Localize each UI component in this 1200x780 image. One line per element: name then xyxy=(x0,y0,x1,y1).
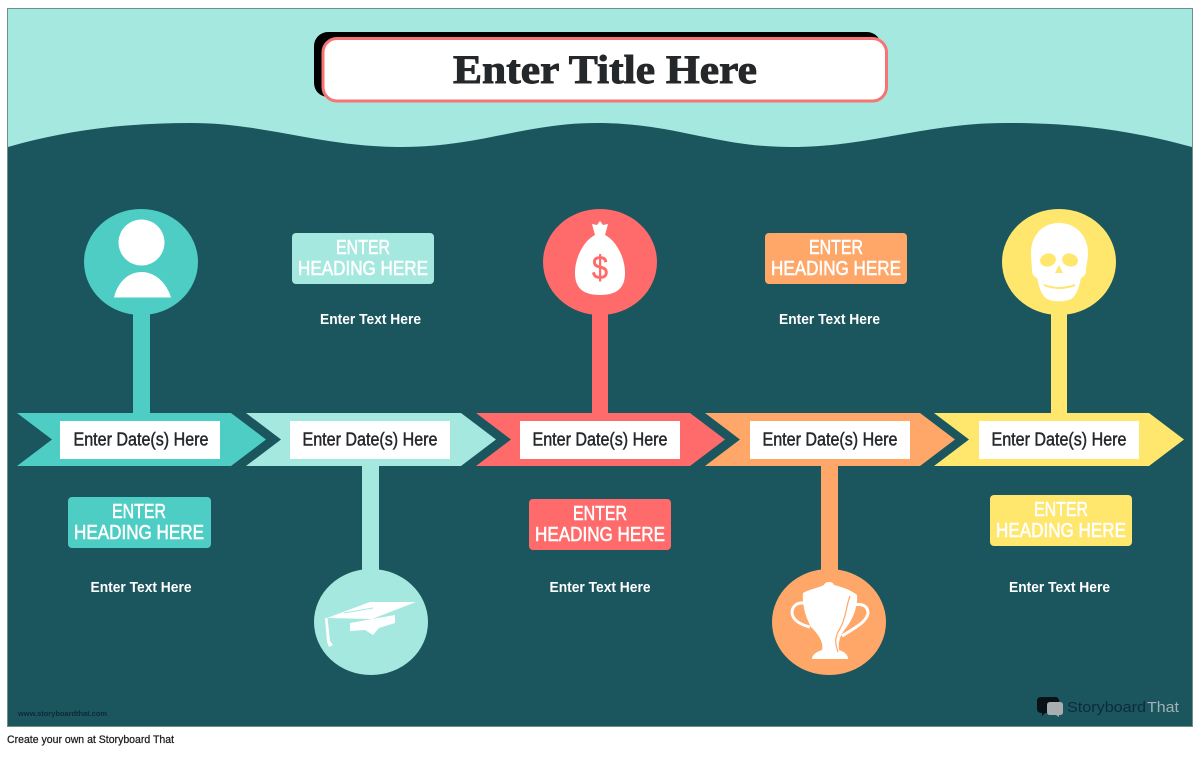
date box 1 xyxy=(60,421,220,459)
date box 4 xyxy=(750,421,910,459)
date box 3 xyxy=(520,421,680,459)
heading 1 xyxy=(68,497,211,548)
icon circle: trophy xyxy=(772,569,886,675)
footer text: Create your own at Storyboard That xyxy=(7,734,174,746)
text 5: Enter Text Here xyxy=(1009,579,1110,596)
heading 3 xyxy=(529,499,671,550)
heading 4: HEADING HERE xyxy=(771,258,901,280)
date box 2: Enter Date(s) Here xyxy=(302,430,438,450)
stem 4 xyxy=(821,466,838,576)
logo: Storyboard That: That xyxy=(1147,699,1180,716)
dark wave background xyxy=(8,123,1192,726)
arrow 3 xyxy=(476,413,725,466)
icon circle: graduation cap xyxy=(314,569,428,675)
arrow 2 xyxy=(246,413,496,466)
stem 2 xyxy=(362,466,379,576)
stage 3: money bag xyxy=(476,209,725,596)
heading 1: ENTER xyxy=(112,501,166,523)
date box 3: Enter Date(s) Here xyxy=(532,430,668,450)
heading 1: HEADING HERE xyxy=(74,522,204,544)
icon circle: money bag xyxy=(543,209,657,315)
heading 3: ENTER xyxy=(573,503,627,525)
stem 3 xyxy=(592,300,608,414)
stem 5 xyxy=(1051,300,1067,414)
date box 1: Enter Date(s) Here xyxy=(74,430,208,450)
heading 2 xyxy=(292,233,434,284)
date box 5 xyxy=(979,421,1139,459)
text 3: Enter Text Here xyxy=(550,579,650,596)
date box 4: Enter Date(s) Here xyxy=(762,430,898,450)
title xyxy=(314,32,886,101)
arrow 4 xyxy=(705,413,955,466)
heading 5: HEADING HERE xyxy=(996,520,1126,542)
title text: Enter Title Here xyxy=(453,47,757,92)
arrow 1 xyxy=(17,413,266,466)
date box 2 xyxy=(290,421,450,459)
logo: Storyboard That xyxy=(1037,697,1180,717)
heading 4 xyxy=(765,233,907,284)
heading 5: ENTER xyxy=(1034,499,1088,521)
heading 4: ENTER xyxy=(809,237,863,259)
heading 2: ENTER xyxy=(336,237,390,259)
stage 1: person xyxy=(17,209,266,596)
heading 3: HEADING HERE xyxy=(535,524,665,546)
icon circle: money bag: $ xyxy=(592,249,608,286)
website text: www.storyboardthat.com xyxy=(17,709,107,718)
text 2: Enter Text Here xyxy=(320,311,421,328)
icon circle: person xyxy=(84,209,198,315)
stage 4: trophy xyxy=(705,233,955,675)
heading 5 xyxy=(990,495,1132,546)
stem 1 xyxy=(133,300,150,414)
logo: Storyboard That: Storyboard xyxy=(1067,699,1146,716)
icon circle: skull xyxy=(1002,209,1116,315)
arrow 5 xyxy=(934,413,1184,466)
stage 2: graduation cap xyxy=(246,233,496,675)
text 1: Enter Text Here xyxy=(90,579,192,596)
date box 5: Enter Date(s) Here xyxy=(992,430,1126,450)
stage 5: skull xyxy=(934,209,1184,596)
heading 2: HEADING HERE xyxy=(298,258,428,280)
text 4: Enter Text Here xyxy=(779,311,880,328)
